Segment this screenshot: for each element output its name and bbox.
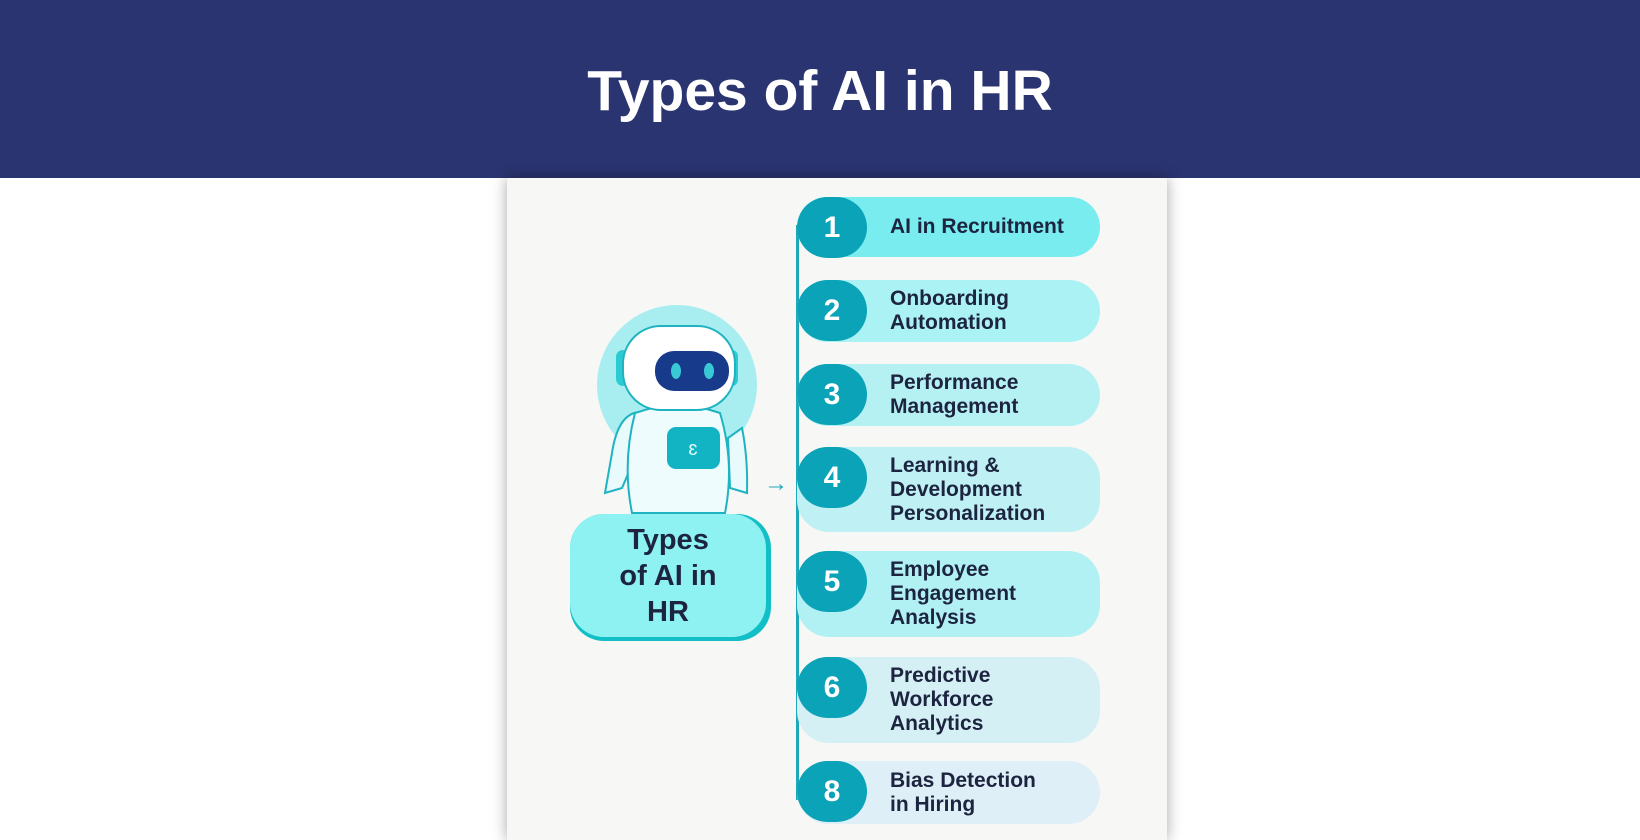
item 6: Workforce — [890, 688, 993, 711]
item 4: Personalization — [890, 502, 1045, 525]
item 5: Employee — [890, 558, 989, 581]
item 4: Development — [890, 478, 1022, 501]
item 5: Analysis — [890, 606, 976, 629]
item 5: 5 — [824, 565, 840, 598]
item 8: in Hiring — [890, 793, 975, 816]
item 8: Bias Detection — [890, 769, 1036, 792]
robot illustration: ɛ — [688, 438, 698, 460]
label box: Types of AI in HR: of AI in — [619, 560, 717, 592]
item 6: Predictive — [890, 664, 990, 687]
item 2: 2 — [824, 294, 840, 327]
item 4: Learning & — [890, 454, 1000, 477]
item 3: 3 — [824, 378, 840, 411]
timeline line — [796, 225, 799, 800]
label box: Types of AI in HR — [570, 514, 771, 641]
item 6: Analytics — [890, 712, 983, 735]
item 5 — [797, 551, 1100, 637]
label box: Types of AI in HR: Types — [627, 524, 709, 556]
label box: Types of AI in HR: HR — [647, 596, 689, 628]
title — [0, 0, 1640, 178]
item 6 — [797, 657, 1100, 743]
item 3: Management — [890, 395, 1018, 418]
item 4: 4 — [824, 461, 840, 494]
item 2: Onboarding — [890, 287, 1009, 310]
item 5: Engagement — [890, 582, 1016, 605]
arrow: → — [764, 470, 788, 497]
item 6: 6 — [824, 671, 840, 704]
robot illustration — [597, 305, 757, 514]
item 3 — [797, 364, 1100, 426]
item 4 — [797, 447, 1100, 532]
item 8: 8 — [824, 775, 840, 808]
item 1 — [797, 197, 1100, 257]
item 1: 1 — [824, 211, 840, 244]
item 2 — [797, 280, 1100, 342]
item 8 — [797, 761, 1100, 824]
item 2: Automation — [890, 311, 1007, 334]
panel: content — [507, 178, 1167, 840]
item 3: Performance — [890, 371, 1018, 394]
item 1: AI in Recruitment — [890, 215, 1064, 238]
title: Types of AI in HR — [587, 59, 1053, 123]
